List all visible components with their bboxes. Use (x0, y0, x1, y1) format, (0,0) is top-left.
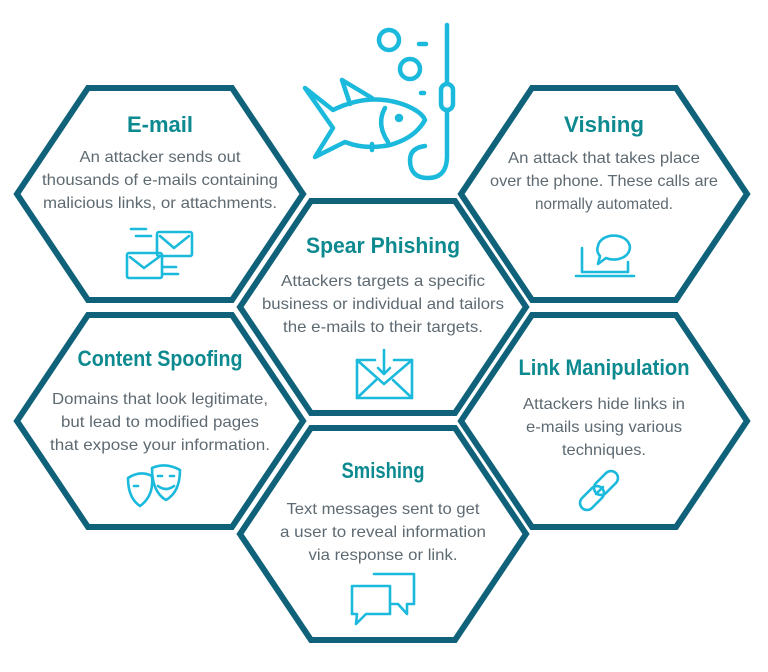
text: E-mail description: malicious links, or attachments. (43, 195, 277, 212)
panel: Spear Phishing (240, 201, 526, 413)
icon: chain link (577, 468, 621, 513)
text: Spear Phishing description: business or individual and tailors (262, 296, 504, 313)
text: E-mail description: An attacker sends out (80, 149, 241, 166)
text: Content Spoofing description: that expose your information. (50, 437, 270, 454)
heading: E-mail: E-mail (127, 112, 193, 137)
text: Vishing description (490, 150, 718, 213)
icon: fish and hook (305, 25, 453, 178)
text: E-mail description: thousands of e-mails containing (42, 172, 278, 189)
icon: chat bubbles (352, 574, 414, 624)
text: E-mail description (42, 149, 278, 212)
text: Spear Phishing description: the e-mails to their targets. (283, 319, 483, 336)
heading: Smishing: Smishing (342, 458, 424, 483)
heading: Spear Phishing: Spear Phishing (306, 233, 460, 258)
text: Vishing description: normally automated. (535, 196, 673, 213)
text: Smishing description: a user to reveal information (280, 524, 486, 541)
text: Content Spoofing description (50, 391, 270, 454)
text: Spear Phishing description (262, 273, 504, 336)
panel: Vishing (461, 88, 747, 300)
text: Link Manipulation description: techniques. (562, 442, 646, 459)
icon: theater masks (128, 465, 180, 506)
icon: laptop with speech bubble (576, 236, 634, 276)
text: Spear Phishing description: Attackers targets a specific (281, 273, 485, 290)
text: Vishing description: An attack that takes place (508, 150, 700, 167)
text: Smishing description (280, 501, 486, 564)
heading: Content Spoofing: Content Spoofing (78, 346, 242, 371)
text: Smishing description: Text messages sent to get (286, 501, 480, 518)
panel: E-mail (17, 88, 303, 300)
panel: Content Spoofing (17, 315, 303, 527)
text: Link Manipulation description (523, 396, 685, 459)
icon: envelopes (127, 229, 192, 278)
icon: envelope with arrow (357, 350, 412, 398)
heading: Vishing: Vishing (564, 112, 644, 137)
panel: Link Manipulation (461, 315, 747, 527)
text: Smishing description: via response or link. (308, 547, 458, 564)
text: Link Manipulation description: Attackers hide links in (523, 396, 685, 413)
panel: Smishing (240, 428, 526, 640)
text: Link Manipulation description: e-mails using various (526, 419, 682, 436)
heading: Link Manipulation: Link Manipulation (518, 355, 690, 380)
text: Content Spoofing description: Domains that look legitimate, (52, 391, 268, 408)
text: Content Spoofing description: but lead to modified pages (61, 414, 259, 431)
text: Vishing description: over the phone. These calls are (490, 173, 718, 190)
